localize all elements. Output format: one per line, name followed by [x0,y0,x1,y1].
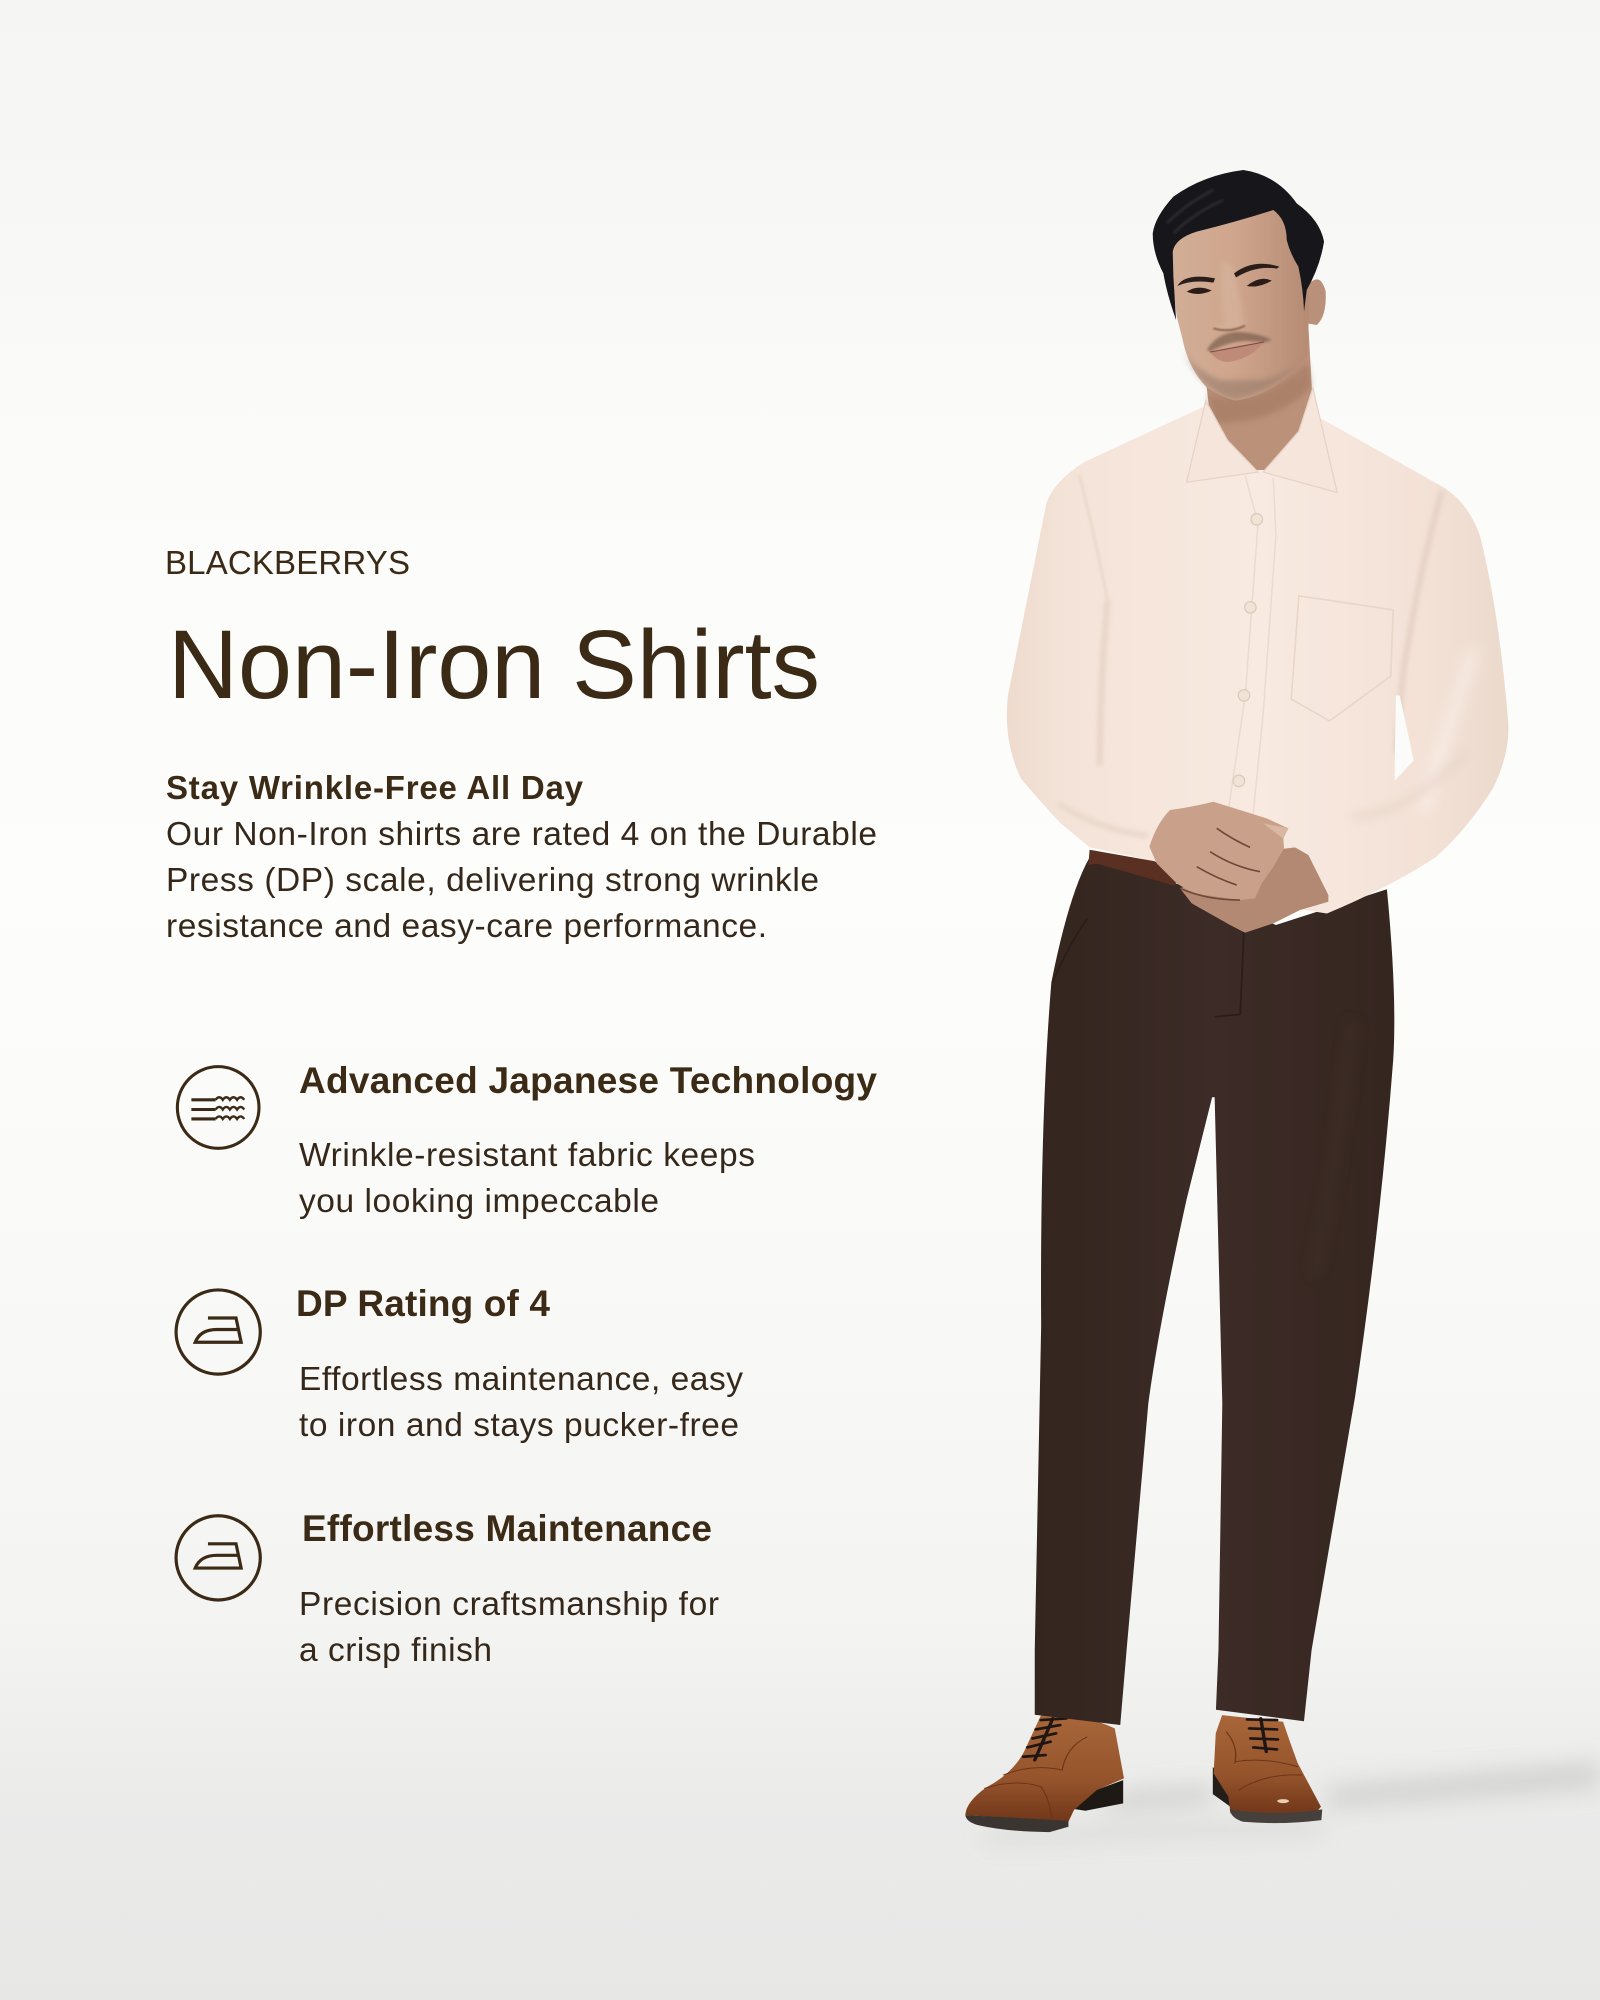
floor shadows [985,1761,1600,1841]
feature: Advanced Japanese Technology: you looking impeccable [299,1183,659,1220]
title: Non-Iron Shirts [168,610,820,719]
man figure [965,170,1508,1832]
feature: DP Rating of 4: DP Rating of 4 [296,1283,550,1324]
trousers [1035,857,1394,1725]
intro text block: Our Non-Iron shirts are rated 4 on the Durable [166,816,877,853]
feature: DP Rating of 4: to iron and stays pucker-free [299,1407,739,1444]
hair [1153,170,1324,320]
feature: Effortless Maintenance: a crisp finish [299,1632,492,1669]
intro text block: resistance and easy-care performance. [166,908,767,945]
face [1172,203,1326,401]
intro text block: Stay Wrinkle-Free All Day [166,769,584,806]
feature: Effortless Maintenance: Precision craftsmanship for [299,1586,719,1623]
shirt placket [1227,476,1276,817]
feature: DP Rating of 4 [296,1283,743,1444]
feature: DP Rating of 4: Effortless maintenance, easy [299,1361,743,1398]
brand label: BLACKBERRYS [165,544,410,581]
right shoe [1213,1715,1322,1823]
left shoe [965,1715,1124,1832]
pocket [1291,596,1393,721]
feature: Advanced Japanese Technology [299,1060,877,1220]
intro text block [166,769,877,945]
belt [1088,850,1180,885]
icon: iron [176,1516,260,1600]
icon: iron [176,1290,260,1374]
intro text block: Press (DP) scale, delivering strong wrinkle [166,862,819,899]
buttons [1233,514,1263,787]
icon: fabric waves [177,1067,259,1148]
feature: Advanced Japanese Technology: Wrinkle-resistant fabric keeps [299,1137,755,1174]
feature: Advanced Japanese Technology: Advanced Japanese Technology [299,1060,877,1101]
neck [1205,320,1313,470]
feature: Effortless Maintenance [299,1508,719,1669]
feature: Effortless Maintenance: Effortless Maintenance [302,1508,712,1549]
shirt [1007,406,1508,914]
clasped hands [1149,802,1328,933]
collar [1187,388,1337,492]
